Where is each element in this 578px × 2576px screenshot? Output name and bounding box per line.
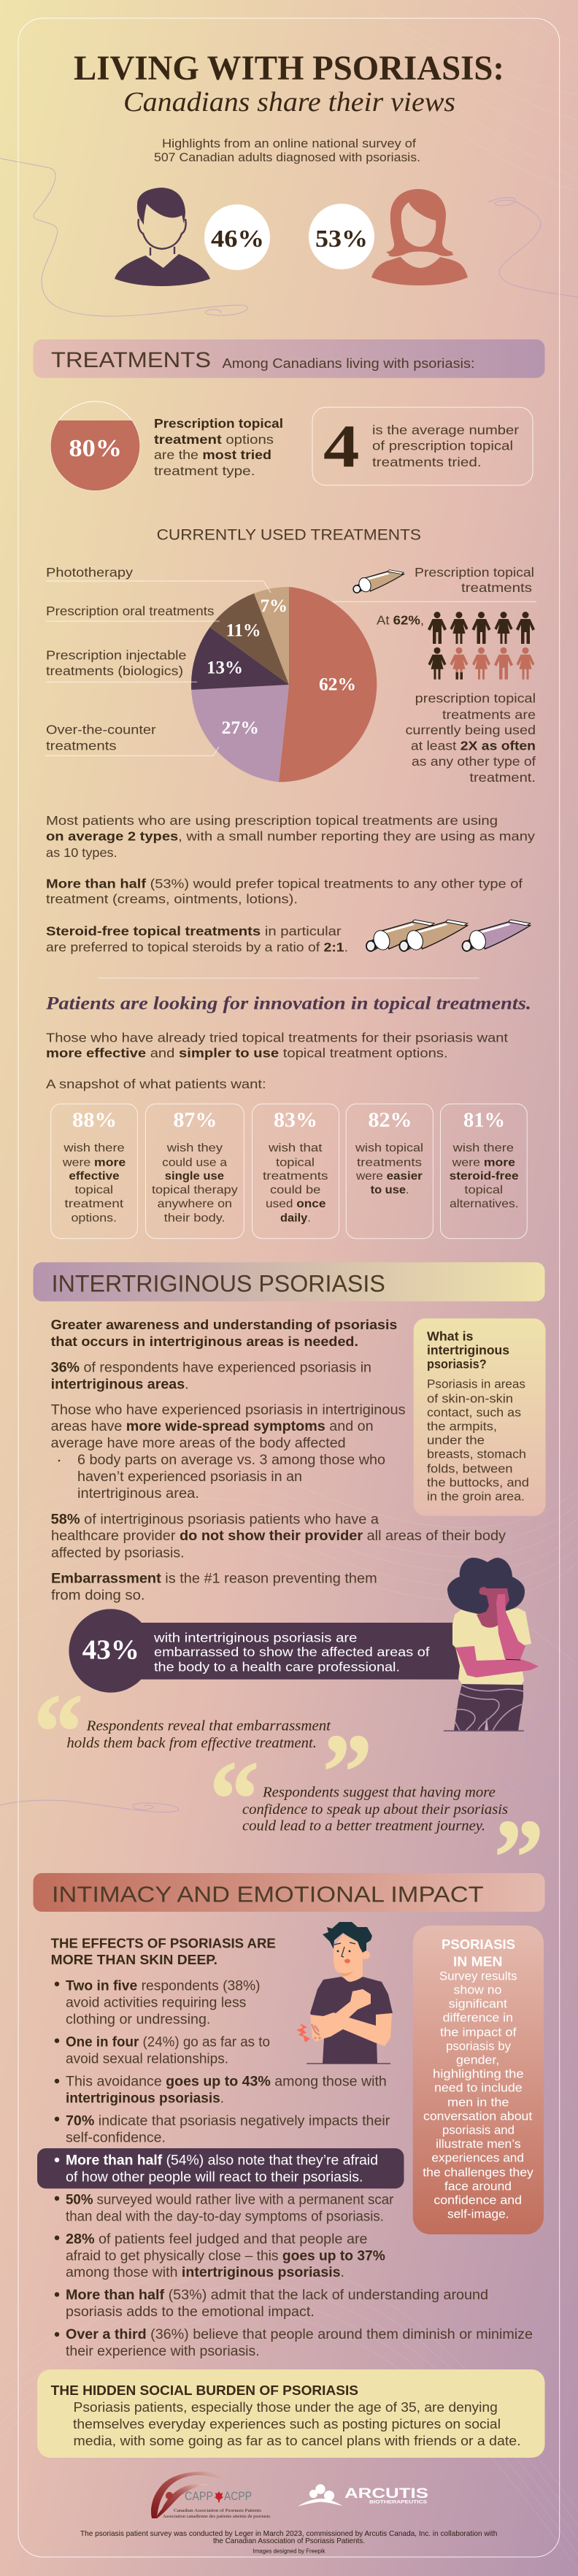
callout: what is intertriginous psoriasis: psoriasis? bbox=[427, 1356, 487, 1371]
illustration: man scratching arm bbox=[296, 1922, 393, 2064]
label: prescription injectable bbox=[46, 647, 197, 682]
label: prescription topical: treatments bbox=[461, 580, 532, 595]
card: 88% bbox=[51, 1104, 137, 1239]
text: steroid-free: are preferred to topical steroids by a ratio of 2:1. bbox=[46, 939, 348, 954]
label: over the counter bbox=[45, 722, 219, 756]
bullet list: impacts bbox=[37, 1978, 533, 2359]
footer: survey source: the Canadian Association of Psoriasis Patients. bbox=[213, 2537, 365, 2545]
text: steroid-free bbox=[46, 924, 348, 954]
pie chart: 13% bbox=[207, 658, 243, 677]
callout: average number bbox=[312, 407, 533, 485]
heading: effects more than skin deep: MORE THAN SKIN DEEP. bbox=[51, 1952, 217, 1967]
callout: what is intertriginous psoriasis: folds, between bbox=[427, 1462, 512, 1475]
text: prescription topical: treatment type. bbox=[154, 464, 255, 478]
heading: effects more than skin deep bbox=[51, 1935, 276, 1967]
label: phototherapy bbox=[46, 565, 271, 593]
quote: confidence to speak up bbox=[209, 1739, 544, 1918]
heading: treatments: TREATMENTS bbox=[51, 348, 211, 372]
quote: confidence to speak up: could lead to a better treatment journey. bbox=[242, 1818, 485, 1834]
card: 81%: alternatives. bbox=[450, 1198, 519, 1210]
callout: psoriasis in men: experiences and bbox=[431, 2151, 524, 2164]
text: 2x as often: treatments are bbox=[442, 707, 536, 722]
highlighted bullet: afraid of reactions: More than half (54%) also note that they’re afraid bbox=[66, 2153, 378, 2168]
bullet list: impacts: avoid activities requiring less bbox=[66, 1995, 246, 2010]
heading: intertriginous psoriasis: INTERTRIGINOUS PSORIASIS bbox=[52, 1270, 385, 1296]
card: 88%: effective bbox=[69, 1170, 120, 1183]
callout: psoriasis in men: self-image. bbox=[447, 2207, 509, 2221]
text: 2x as often: currently being used bbox=[406, 723, 536, 737]
title: LIVING WITH PSORIASIS: bbox=[74, 49, 504, 88]
text: those who have tried: more effective and simpler to use topical treatment options. bbox=[46, 1045, 448, 1060]
callout: psoriasis in men: significant bbox=[449, 1998, 507, 2011]
bullet list: impacts: their experience with psoriasis. bbox=[66, 2344, 260, 2359]
heading: currently used treatments: CURRENTLY USED TREATMENTS bbox=[157, 526, 421, 543]
callout: what is intertriginous psoriasis: What is bbox=[427, 1329, 474, 1344]
callout: psoriasis in men: the challenges they bbox=[423, 2166, 534, 2179]
quote: embarrassment holds them back: holds them back from effective treatment. bbox=[66, 1735, 317, 1751]
text: 36% of respondents bbox=[51, 1360, 371, 1392]
callout: psoriasis in men: PSORIASIS bbox=[442, 1937, 515, 1952]
icon: people pictogram bbox=[428, 612, 535, 680]
card: 83%: used once bbox=[266, 1198, 326, 1210]
card: 83%: treatments bbox=[263, 1170, 328, 1183]
bullet list: impacts: This avoidance goes up to 43% among those with bbox=[66, 2075, 387, 2090]
card: 88%: options. bbox=[72, 1212, 117, 1224]
text: 58% do not show provider: affected by psoriasis. bbox=[51, 1545, 184, 1561]
callout: average number: 4 bbox=[323, 412, 359, 480]
bullet list: impacts: avoid sexual relationships. bbox=[66, 2051, 228, 2066]
pie chart: 7% bbox=[260, 596, 288, 616]
bullet list: impacts: clothing or undressing. bbox=[66, 2012, 210, 2027]
stat banner: 43%: embarrassed to show the affected areas of bbox=[154, 1645, 430, 1659]
stat banner: 43% bbox=[69, 1609, 460, 1693]
bullet list: impacts: psoriasis adds to the emotional impact. bbox=[66, 2304, 315, 2320]
stat: 80% circle bbox=[50, 401, 140, 491]
label: prescription injectable: treatments (biologics) bbox=[46, 664, 183, 678]
callout: psoriasis in men: confidence and bbox=[434, 2194, 522, 2207]
text: average types: as 10 types. bbox=[46, 845, 117, 860]
stat: 53%: 53% bbox=[315, 226, 368, 253]
quote: confidence to speak up: Respondents suggest that having more bbox=[262, 1785, 496, 1801]
quote: embarrassment holds them back: “ bbox=[34, 1672, 83, 1792]
callout: psoriasis in men: highlighting the bbox=[433, 2068, 524, 2081]
card: 83%: daily. bbox=[280, 1212, 311, 1224]
stat: 80% circle: 80% bbox=[69, 435, 122, 462]
card: 82%: to use. bbox=[371, 1184, 409, 1196]
text: embarrassment: from doing so. bbox=[51, 1588, 144, 1603]
intro text: Highlights from an online national survey of bbox=[162, 137, 416, 150]
pie chart: 11% bbox=[226, 621, 261, 641]
card: 88%: topical bbox=[74, 1184, 113, 1196]
title: Canadians share their views bbox=[123, 87, 455, 118]
bullet list: impacts: than deal with the day-to-day symptoms of psoriasis. bbox=[66, 2209, 384, 2224]
title bbox=[74, 49, 504, 118]
card: 87%: wish they bbox=[166, 1142, 223, 1154]
callout: hidden social burden bbox=[37, 2369, 544, 2458]
text: embarrassment: Embarrassment is the #1 reason preventing them bbox=[51, 1571, 377, 1586]
panel: intimacy and emotional impact bbox=[34, 1873, 544, 2458]
logo: CAPP ACPP: Canadian Association of Psoriasis Patients bbox=[174, 2508, 262, 2513]
text: more than half prefer topical: More than half (53%) would prefer topical treatments to any other type of bbox=[46, 877, 523, 891]
callout: what is intertriginous psoriasis: the buttocks, and bbox=[427, 1476, 529, 1489]
card: 82%: wish topical bbox=[355, 1142, 423, 1154]
footer: survey source: Images designed by Freepik bbox=[253, 2547, 325, 2554]
bullet list: impacts: self-confidence. bbox=[66, 2130, 166, 2145]
card: 87%: anywhere on bbox=[158, 1198, 232, 1210]
illustration: embarrassed woman bbox=[444, 1558, 539, 1731]
bullet list: impacts: afraid to get physically close – this goes up to 37% bbox=[66, 2248, 385, 2264]
label: prescription topical: Prescription topical bbox=[415, 565, 534, 580]
quote: confidence to speak up: “ bbox=[209, 1739, 259, 1859]
text: average types: Most patients who are using prescription topical treatments are using bbox=[46, 813, 498, 828]
label: prescription injectable: Prescription injectable bbox=[46, 647, 187, 662]
callout: what is intertriginous psoriasis: in the groin area. bbox=[427, 1490, 525, 1503]
text: average types bbox=[46, 813, 535, 860]
stat banner: 43%: 43% bbox=[82, 1634, 139, 1665]
text: those who have tried: Those who have already tried topical treatments for their psoriasis want bbox=[46, 1030, 508, 1045]
card: 83%: topical bbox=[276, 1156, 315, 1169]
footer: survey source bbox=[80, 2529, 497, 2554]
heading: treatments bbox=[34, 339, 544, 378]
quote: embarrassment holds them back: Respondents reveal that embarrassment bbox=[86, 1718, 331, 1734]
card: 81%: were more bbox=[452, 1156, 515, 1169]
heading: intertriginous psoriasis bbox=[34, 1262, 544, 1302]
intro text bbox=[154, 137, 420, 164]
logo: Arcutis: BIOTHERAPEUTICS bbox=[369, 2501, 427, 2505]
card: 83% bbox=[253, 1104, 339, 1239]
callout: psoriasis in men: conversation about bbox=[423, 2110, 533, 2123]
card: 81%: 81% bbox=[463, 1108, 505, 1131]
quote: confidence to speak up: confidence to speak up about their psoriasis bbox=[242, 1802, 508, 1818]
text: prescription topical: are the most tried bbox=[154, 447, 271, 462]
text: greater awareness: Greater awareness and understanding of psoriasis bbox=[51, 1317, 397, 1332]
callout: average number: is the average number bbox=[372, 423, 519, 437]
text: prescription topical: treatment options bbox=[154, 432, 274, 447]
card: 88%: were more bbox=[62, 1156, 126, 1169]
label: over the counter: treatments bbox=[46, 738, 117, 753]
text: 36% of respondents: intertriginous areas . bbox=[51, 1377, 189, 1392]
card: 88%: treatment bbox=[64, 1198, 124, 1210]
card: 81% bbox=[441, 1104, 527, 1239]
text: 2x as often: at least 2X as often bbox=[411, 739, 536, 753]
text: wide-spread symptoms: Those who have experienced psoriasis in intertriginous bbox=[51, 1402, 406, 1418]
panel: intertriginous psoriasis bbox=[34, 1262, 546, 1918]
text: 2x as often: prescription topical bbox=[415, 691, 536, 706]
card: 87%: could use a bbox=[162, 1156, 227, 1169]
text: average types: on average 2 types , with a small number reporting they are using as many bbox=[46, 829, 535, 844]
bullet list: impacts: among those with intertriginous psoriasis . bbox=[66, 2265, 344, 2280]
card: 88%: wish there bbox=[63, 1142, 125, 1154]
callout: psoriasis in men: psoriasis and bbox=[442, 2123, 515, 2137]
card: 87% bbox=[146, 1104, 244, 1239]
card: 87%: 87% bbox=[173, 1108, 217, 1131]
card: 82%: 82% bbox=[368, 1108, 412, 1131]
text: greater awareness bbox=[51, 1317, 397, 1349]
highlighted bullet: afraid of reactions: of how other people will react to their psoriasis. bbox=[66, 2169, 363, 2185]
callout: what is intertriginous psoriasis: the armpits, bbox=[427, 1420, 497, 1433]
callout: psoriasis in men: show no bbox=[454, 1984, 501, 1997]
text: wide-spread symptoms: 6 body parts on average vs. 3 among those who bbox=[77, 1453, 385, 1468]
bullet list: impacts: 50% surveyed would rather live with a permanent scar bbox=[66, 2192, 394, 2207]
card: 81%: steroid-free bbox=[450, 1170, 519, 1183]
quote: embarrassment holds them back bbox=[34, 1672, 372, 1832]
text: 2x as often: treatment. bbox=[469, 770, 536, 785]
callout: what is intertriginous psoriasis: breasts, stomach bbox=[427, 1447, 526, 1461]
text: steroid-free: Steroid-free topical treatments in particular bbox=[46, 924, 342, 939]
footer: survey source: The psoriasis patient survey was conducted by Leger in March 2023, commissioned by Arcutis Canada, Inc. in collaboration with bbox=[80, 2529, 497, 2538]
callout: psoriasis in men: psoriasis by bbox=[446, 2040, 512, 2053]
callout: psoriasis in men: illustrate men’s bbox=[436, 2137, 521, 2150]
text: wide-spread symptoms: intertriginous area. bbox=[77, 1486, 199, 1502]
card: 83%: wish that bbox=[268, 1142, 323, 1154]
icon: three tubes ratio bbox=[366, 920, 530, 952]
callout: average number: treatments tried. bbox=[372, 455, 482, 469]
pie chart: 62% bbox=[319, 675, 356, 695]
callout: psoriasis in men: men in the bbox=[447, 2096, 509, 2109]
callout: what is intertriginous psoriasis: under the bbox=[427, 1434, 485, 1447]
logo: CAPP ACPP: Association canadienne des patients atteints de psoriasis bbox=[163, 2514, 270, 2519]
text: wide-spread symptoms: average have more areas of the body affected bbox=[51, 1436, 346, 1451]
logo: CAPP ACPP bbox=[151, 2472, 270, 2519]
stat: 53% bbox=[309, 204, 374, 269]
callout: psoriasis in men: gender, bbox=[456, 2054, 499, 2067]
text: prescription topical bbox=[154, 416, 283, 478]
logo: Arcutis: ARCUTIS bbox=[344, 2486, 428, 2502]
text: prescription topical: Prescription topical bbox=[154, 416, 283, 431]
text: embarrassment bbox=[51, 1571, 377, 1603]
bullet list: impacts: More than half (53%) admit that the lack of understanding around bbox=[66, 2288, 488, 2303]
text: those who have tried bbox=[46, 1030, 508, 1091]
pie chart bbox=[191, 587, 377, 782]
stat: 46% bbox=[204, 204, 270, 270]
heading: treatments: Among Canadians living with psoriasis: bbox=[222, 356, 474, 371]
quote: confidence to speak up: ” bbox=[494, 1798, 544, 1918]
icon: woman silhouette bbox=[371, 189, 468, 285]
text: those who have tried: A snapshot of what patients want: bbox=[46, 1077, 266, 1091]
quote: embarrassment holds them back: ” bbox=[323, 1712, 372, 1832]
bullet list: impacts: intertriginous psoriasis. bbox=[66, 2091, 224, 2106]
stat banner: 43%: the body to a health care professional. bbox=[154, 1659, 400, 1674]
text: 58% do not show provider bbox=[51, 1512, 506, 1561]
callout: psoriasis in men: IN MEN bbox=[453, 1953, 502, 1969]
label: phototherapy: Phototherapy bbox=[46, 565, 133, 580]
callout: psoriasis in men: the impact of bbox=[440, 2026, 517, 2039]
text: 58% do not show provider: healthcare provider do not show their provider all areas of their body bbox=[51, 1529, 506, 1544]
heading: intimacy and emotional impact bbox=[34, 1873, 544, 1912]
text: 36% of respondents: 36% of respondents have experienced psoriasis in bbox=[51, 1360, 371, 1375]
callout: what is intertriginous psoriasis: of skin-on-skin bbox=[427, 1393, 513, 1406]
callout: psoriasis in men: face around bbox=[444, 2180, 512, 2193]
text: at 62%: At 62%, bbox=[377, 613, 424, 628]
logo: CAPP ACPP: ACPP bbox=[224, 2489, 252, 2503]
text: wide-spread symptoms: haven’t experienced psoriasis in an bbox=[77, 1469, 302, 1485]
stat banner: 43%: with intertriginous psoriasis are bbox=[153, 1630, 357, 1645]
callout: psoriasis in men: need to include bbox=[434, 2082, 523, 2095]
text: 58% do not show provider: 58% of intertriginous psoriasis patients who have a bbox=[51, 1512, 379, 1527]
label: prescription oral: Prescription oral treatments bbox=[46, 604, 215, 618]
heading: patients looking for innovation: Patients are looking for innovation in topical treatments. bbox=[45, 994, 531, 1014]
heading: effects more than skin deep: THE EFFECTS OF PSORIASIS ARE bbox=[51, 1935, 276, 1950]
bullet list: impacts: 28% of patients feel judged and that people are bbox=[66, 2231, 368, 2247]
text: more than half prefer topical bbox=[46, 877, 523, 907]
card: 82%: treatments bbox=[357, 1156, 422, 1169]
callout: psoriasis in men bbox=[413, 1926, 544, 2234]
card: 82% bbox=[346, 1104, 433, 1239]
callout: average number: of prescription topical bbox=[372, 439, 513, 453]
bullet list: impacts: Two in five respondents (38%) bbox=[66, 1978, 261, 1993]
label: over the counter: Over-the-counter bbox=[46, 722, 156, 737]
bullet list: impacts: 70% indicate that psoriasis negatively impacts their bbox=[66, 2114, 390, 2129]
icon: man silhouette bbox=[115, 188, 210, 286]
callout: psoriasis in men: Survey results bbox=[439, 1970, 517, 1983]
callout: what is intertriginous psoriasis: Psoriasis in areas bbox=[427, 1378, 525, 1391]
panel: treatments bbox=[34, 339, 544, 1239]
text: 2x as often: as any other type of bbox=[412, 754, 536, 769]
text: wide-spread symptoms bbox=[51, 1402, 406, 1502]
card: 87%: their body. bbox=[164, 1212, 226, 1224]
callout: hidden social burden: THE HIDDEN SOCIAL BURDEN OF PSORIASIS bbox=[51, 2383, 358, 2398]
callout: what is intertriginous psoriasis bbox=[414, 1318, 546, 1516]
callout: what is intertriginous psoriasis: contact, such as bbox=[427, 1407, 521, 1420]
logo: Arcutis bbox=[298, 2484, 428, 2507]
pie chart: 27% bbox=[222, 718, 259, 738]
logo: CAPP ACPP: CAPP bbox=[185, 2489, 213, 2503]
card: 88%: 88% bbox=[72, 1108, 117, 1131]
highlighted bullet: afraid of reactions bbox=[37, 2148, 404, 2188]
bullet list: impacts: Over a third (36%) believe that people around them diminish or minimize bbox=[66, 2327, 533, 2342]
card: 81%: wish there bbox=[452, 1142, 514, 1154]
text: wide-spread symptoms: areas have more wide-spread symptoms and on bbox=[51, 1419, 374, 1434]
bullet list: impacts: One in four (24%) go as far as to bbox=[66, 2034, 270, 2050]
label: prescription topical bbox=[333, 565, 536, 601]
stat: 46%: 46% bbox=[211, 226, 264, 253]
card: 81%: topical bbox=[464, 1184, 503, 1196]
callout: hidden social burden: Psoriasis patients, especially those under the age of 35, are denying bbox=[73, 2399, 498, 2415]
heading: intimacy and emotional impact: INTIMACY AND EMOTIONAL IMPACT bbox=[52, 1881, 484, 1907]
card: 87%: single use bbox=[165, 1170, 224, 1183]
card: 87%: topical therapy bbox=[152, 1184, 238, 1196]
text: 2x as often bbox=[406, 691, 536, 785]
text: greater awareness: that occurs in intertriginous areas is needed. bbox=[51, 1334, 358, 1349]
icon: small tube bbox=[353, 570, 404, 593]
callout: what is intertriginous psoriasis: intertriginous bbox=[427, 1343, 509, 1358]
card: 82%: were easier bbox=[355, 1170, 423, 1183]
callout: psoriasis in men: difference in bbox=[443, 2011, 513, 2024]
card: 83%: could be bbox=[270, 1184, 321, 1196]
callout: hidden social burden: media, with some going as far as to cancel plans with friends or a date. bbox=[73, 2433, 521, 2448]
intro text: 507 Canadian adults diagnosed with psoriasis. bbox=[154, 151, 420, 164]
callout: hidden social burden: themselves everyday experiences such as posting pictures on social bbox=[73, 2416, 501, 2431]
card: 83%: 83% bbox=[274, 1108, 317, 1131]
text: more than half prefer topical: treatment (creams, ointments, lotions). bbox=[46, 892, 298, 907]
